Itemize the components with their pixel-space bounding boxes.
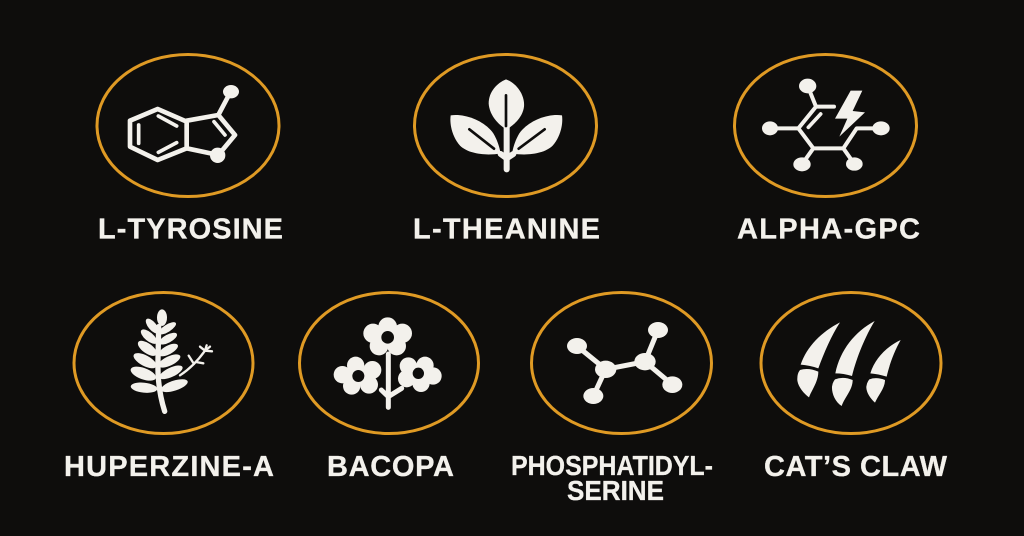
label: L-Tyrosine: L-TYROSINE	[98, 214, 283, 246]
label: Phosphatidylserine: PHOSPHATIDYL-	[511, 450, 713, 481]
label: Cat's Claw: CAT’S CLAW	[764, 451, 948, 483]
orange ring	[300, 292, 478, 434]
panel: L-Theanine	[413, 54, 600, 246]
orange ring	[74, 292, 253, 434]
orange ring	[97, 54, 279, 196]
icon: three leaves	[450, 79, 562, 169]
label: Huperzine-A: HUPERZINE-A	[64, 451, 274, 483]
icon: club moss sprig	[129, 309, 212, 411]
panel: Huperzine-A	[64, 292, 274, 483]
orange ring	[761, 292, 941, 434]
panel: Alpha-GPC	[734, 54, 920, 246]
panel: Cat's Claw	[761, 292, 948, 483]
label: Alpha-GPC: ALPHA-GPC	[737, 214, 920, 246]
label: Phosphatidylserine: SERINE	[567, 475, 664, 506]
label: Bacopa: BACOPA	[327, 451, 454, 483]
panel: L-Tyrosine	[97, 54, 283, 246]
panel: Bacopa	[300, 292, 478, 483]
label: L-Theanine: L-THEANINE	[413, 214, 600, 246]
icon: molecule with lightning bolt	[762, 79, 890, 171]
orange ring	[414, 54, 596, 196]
orange ring	[532, 292, 712, 434]
icon: indole molecule	[130, 85, 239, 163]
orange ring	[734, 54, 916, 196]
label: Phosphatidylserine	[511, 450, 713, 506]
icon: branched molecule	[567, 322, 682, 404]
panel: Phosphatidylserine	[511, 292, 713, 506]
icon: three flowers	[334, 317, 442, 407]
icon: three claws	[797, 321, 901, 406]
